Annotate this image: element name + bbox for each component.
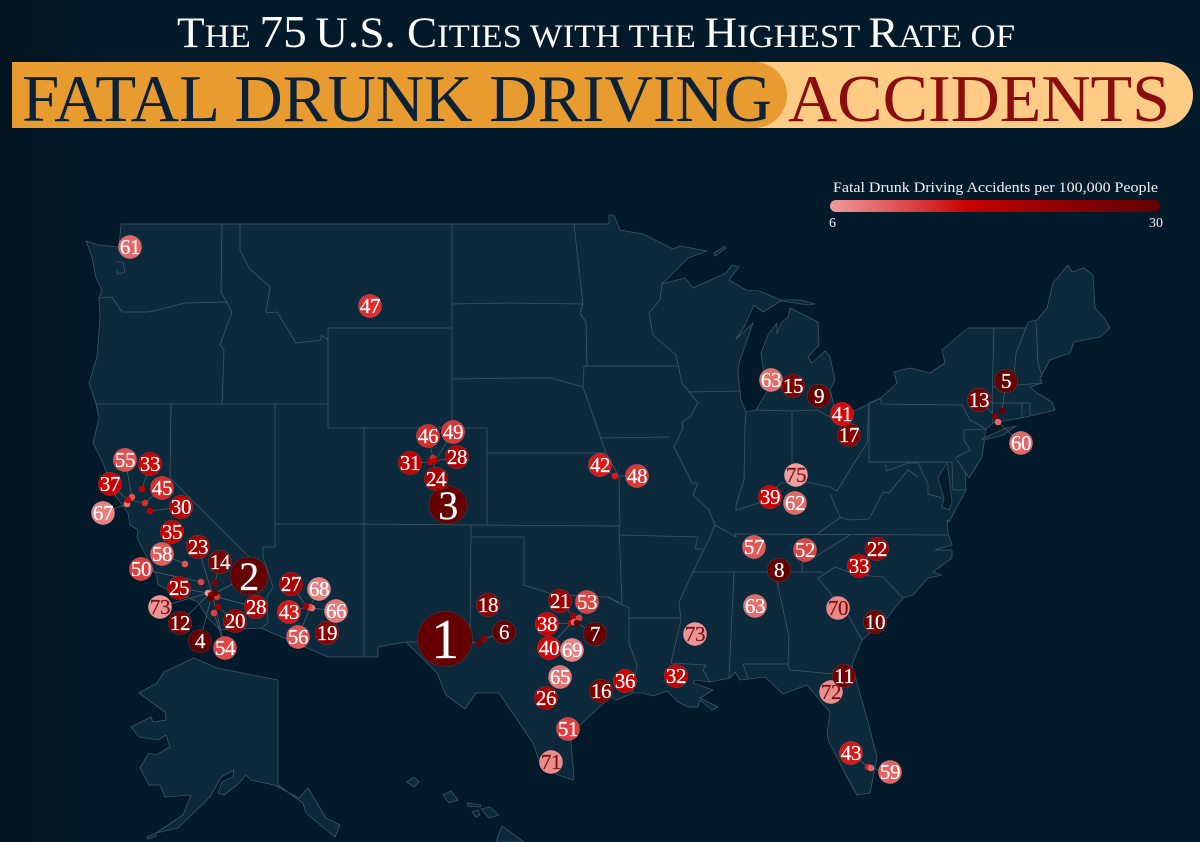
marker 9: 9 — [814, 384, 824, 408]
marker 3 — [429, 483, 467, 528]
marker 38: 38 — [537, 612, 557, 636]
marker 45: 45 — [152, 476, 172, 500]
marker 15: 15 — [783, 374, 803, 398]
marker 5: 5 — [1001, 369, 1011, 393]
marker 49: 49 — [443, 420, 463, 444]
marker 70: 70 — [828, 596, 848, 620]
marker 43 Florida: 43 — [841, 741, 861, 765]
marker 14: 14 — [210, 550, 231, 574]
marker 16: 16 — [591, 679, 611, 703]
marker 71: 71 — [541, 750, 561, 774]
marker 72: 72 — [821, 680, 841, 704]
marker 31: 31 — [400, 451, 420, 475]
marker 62: 62 — [785, 491, 805, 515]
marker 7: 7 — [590, 622, 600, 646]
Long Island — [982, 426, 1016, 440]
title banner: ACCIDENTS — [788, 62, 1170, 136]
marker 9 — [807, 384, 831, 408]
Chesapeake Bay — [938, 463, 952, 510]
title: top line: THE 75 U.S. CITIES WITH THE HIGHEST RATE OF — [177, 7, 1015, 57]
marker 13: 13 — [969, 388, 989, 412]
marker 42: 42 — [590, 453, 610, 477]
marker 22: 22 — [867, 537, 887, 561]
marker 55: 55 — [115, 448, 135, 472]
marker 26: 26 — [536, 686, 556, 710]
marker 5 — [994, 369, 1018, 393]
marker 3: 3 — [438, 483, 458, 528]
marker 7 — [583, 622, 607, 646]
marker 23: 23 — [188, 535, 208, 559]
marker 25: 25 — [169, 576, 189, 600]
marker 50: 50 — [131, 557, 151, 581]
marker 4: 4 — [195, 629, 206, 653]
marker 36: 36 — [615, 669, 635, 693]
marker 33 California: 33 — [140, 452, 160, 476]
marker 28 Colorado: 28 — [447, 445, 467, 469]
marker 73 Mississippi: 73 — [685, 622, 705, 646]
marker 57: 57 — [744, 535, 764, 559]
marker 48: 48 — [627, 464, 647, 488]
map: United States — [86, 215, 1110, 842]
legend: colour scale: 30 — [1149, 216, 1163, 231]
marker 60: 60 — [1011, 431, 1031, 455]
marker 46: 46 — [418, 424, 438, 448]
marker 17: 17 — [839, 423, 859, 447]
marker 20: 20 — [225, 609, 245, 633]
marker 39: 39 — [760, 485, 780, 509]
marker 10: 10 — [865, 610, 885, 634]
title banner: FATAL DRUNK DRIVING — [22, 62, 772, 136]
marker 27: 27 — [281, 572, 301, 596]
marker 63 Alabama: 63 — [745, 594, 765, 618]
Alaska — [131, 658, 340, 837]
marker 2 — [230, 554, 268, 599]
marker 51: 51 — [558, 717, 578, 741]
marker 6 — [492, 620, 516, 644]
marker 1 — [418, 609, 472, 671]
marker 47 Wyoming/Montana: 47 — [360, 294, 380, 318]
city rank markers — [91, 235, 1033, 784]
marker 12: 12 — [170, 611, 190, 635]
marker 40: 40 — [539, 636, 559, 660]
marker 28 California: 28 — [246, 595, 266, 619]
marker 6: 6 — [499, 620, 509, 644]
marker 54: 54 — [215, 636, 236, 660]
marker 2: 2 — [239, 554, 259, 599]
marker 8 — [767, 558, 791, 582]
Aleutian island — [147, 833, 156, 839]
marker 56: 56 — [288, 625, 308, 649]
Puget Sound — [116, 262, 125, 274]
marker 58: 58 — [152, 542, 172, 566]
marker 63 Michigan: 63 — [761, 368, 781, 392]
marker 65: 65 — [550, 665, 570, 689]
marker 30: 30 — [171, 495, 191, 519]
marker 73 California: 73 — [150, 595, 170, 619]
marker 24: 24 — [426, 467, 447, 491]
marker 21: 21 — [550, 589, 570, 613]
title banner — [12, 62, 1193, 136]
marker 18: 18 — [478, 593, 498, 617]
city location dots — [124, 408, 1005, 771]
marker 32: 32 — [666, 664, 686, 688]
marker 61 Washington: 61 — [120, 235, 140, 259]
state borders — [96, 224, 1042, 693]
marker 8: 8 — [774, 558, 784, 582]
marker 43 Arizona: 43 — [279, 600, 299, 624]
marker 33 North Carolina: 33 — [849, 554, 869, 578]
legend: colour scale: Fatal Drunk Driving Accidents per 100,000 People — [833, 180, 1158, 196]
marker 69: 69 — [562, 638, 582, 662]
marker 75: 75 — [786, 463, 806, 487]
Hawaii — [407, 777, 524, 842]
marker 19: 19 — [317, 621, 337, 645]
marker 41: 41 — [832, 402, 852, 426]
marker 52: 52 — [795, 538, 815, 562]
marker 53: 53 — [577, 590, 597, 614]
marker 67: 67 — [93, 501, 113, 525]
marker 1: 1 — [431, 609, 459, 671]
marker 59: 59 — [880, 760, 900, 784]
marker 4 — [188, 629, 212, 653]
marker 35: 35 — [162, 520, 182, 544]
Isle Royale — [714, 246, 726, 256]
legend: colour scale — [829, 180, 1163, 231]
marker 68: 68 — [309, 577, 329, 601]
legend: colour scale: 6 — [829, 216, 836, 231]
leader lines — [103, 381, 1021, 772]
marker 11: 11 — [834, 664, 854, 688]
marker 66: 66 — [326, 599, 346, 623]
marker 37: 37 — [100, 472, 120, 496]
